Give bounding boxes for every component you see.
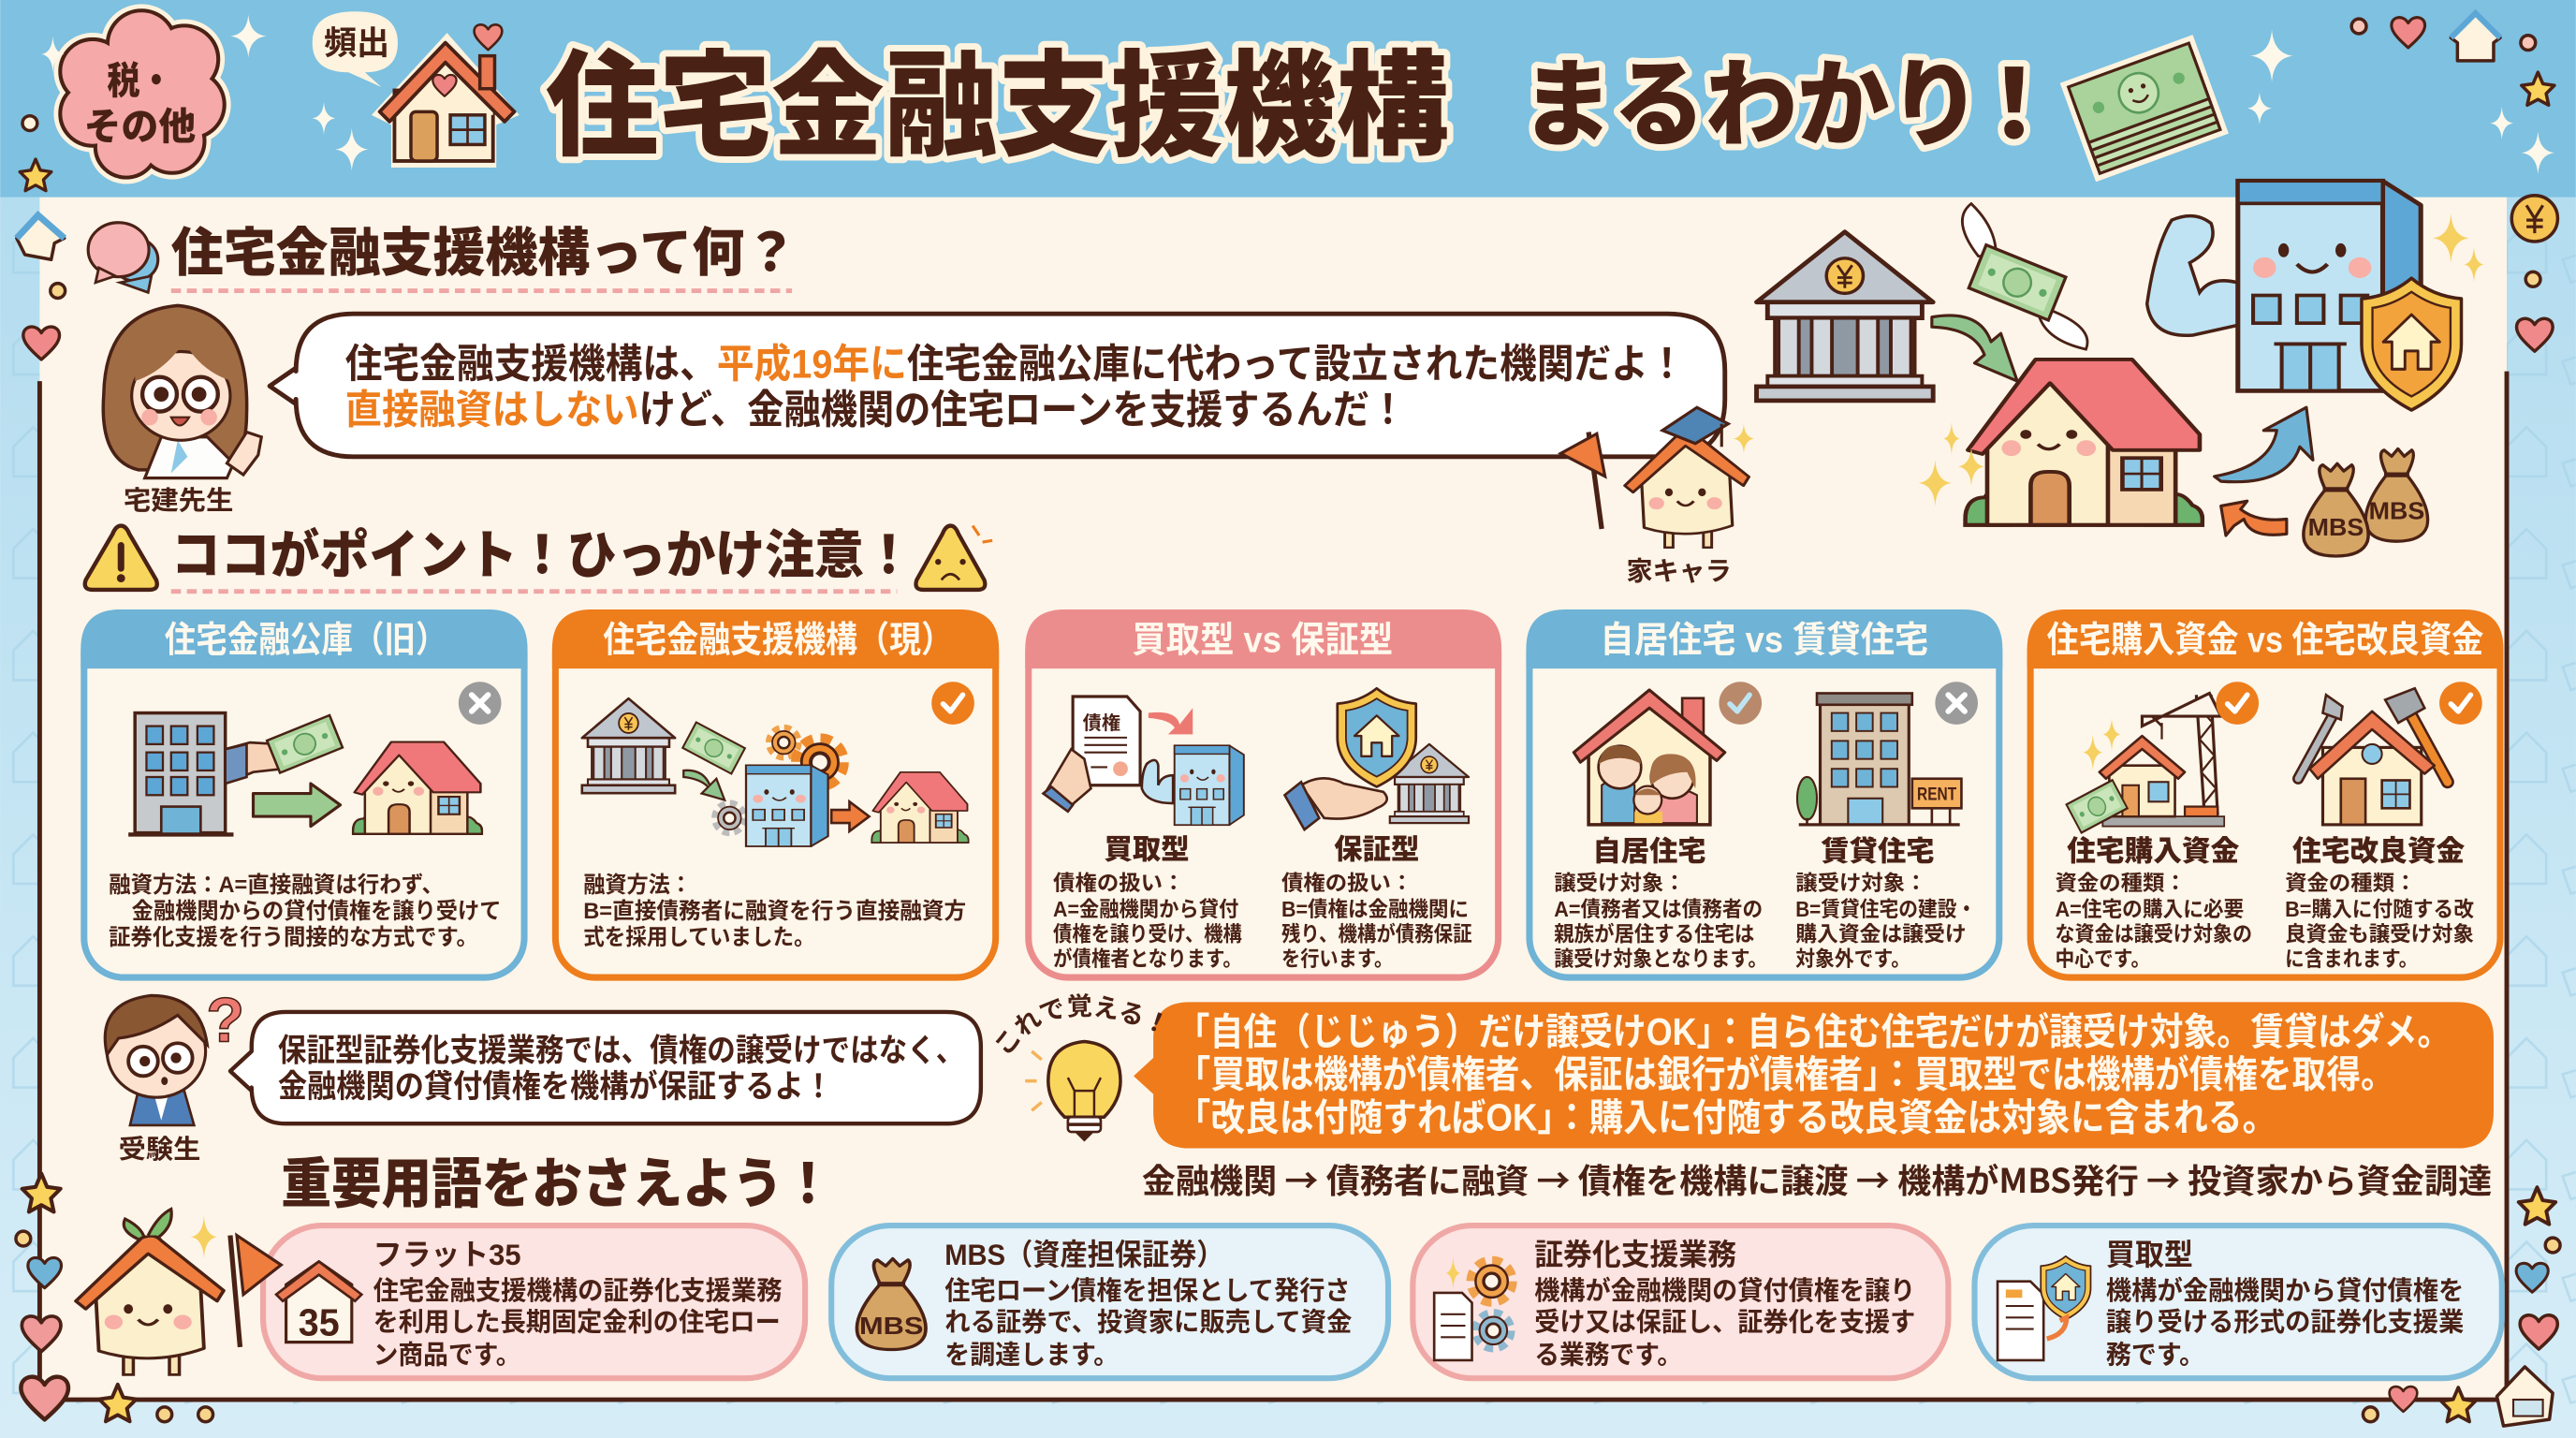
text: method A: 融資方法：A=直接融資は行わず、 xyxy=(109,873,444,898)
text: 住宅購入資金 column: 中心です。 xyxy=(2055,946,2150,971)
text: 自居住宅 column: 譲受け対象： xyxy=(1554,871,1686,895)
text: 住宅ローン債権を担保として発行さ xyxy=(944,1276,1351,1305)
text: 保証型 column: 残り、機構が債務保証 xyxy=(1281,921,1472,946)
header sparkles and decorations xyxy=(20,13,2554,191)
text: 住宅改良資金 column: 資金の種類： xyxy=(2285,871,2416,895)
arrow: building up xyxy=(2215,407,2313,482)
term card: MBS xyxy=(831,1225,1388,1378)
text: 賃貸住宅 column: 購入資金は譲受け xyxy=(1795,921,1967,946)
character: 家キャラ xyxy=(1560,407,1754,585)
card: 住宅金融支援機構（現）: 住宅金融支援機構（現） xyxy=(603,621,953,661)
icon: MBS bag xyxy=(856,1258,926,1350)
text: を利用した長期固定金利の住宅ロー xyxy=(373,1307,781,1336)
text: フラット35 xyxy=(373,1238,521,1271)
text: 受け又は保証し、証券化を支援す xyxy=(1534,1307,1915,1336)
heading: ココがポイント！ひっかけ注意！: ココがポイント！ひっかけ注意！ xyxy=(171,525,914,584)
text: れる証券で、投資家に販売して資金 xyxy=(944,1307,1352,1336)
title xyxy=(546,43,2061,171)
text: 買取型 column: A=金融機関から貸付 xyxy=(1053,897,1239,921)
text: method A xyxy=(109,873,501,950)
icon: MBS bags: MBS xyxy=(2308,513,2364,541)
callout: key takeaways xyxy=(1134,1002,2494,1149)
text: 保証型 column xyxy=(1281,835,1472,971)
text: 住宅購入資金 column: 住宅購入資金 xyxy=(2067,834,2240,867)
card: 住宅金融公庫（旧） xyxy=(80,609,528,977)
term card: 買取型 xyxy=(1974,1225,2502,1378)
text: 買取型 column: が債権者となります。 xyxy=(1053,946,1242,971)
text: 機構が金融機関の貸付債権を譲り xyxy=(1534,1275,1915,1305)
term card: 証券化支援業務 xyxy=(1412,1225,1948,1378)
callout: key takeaways: 「改良は付随すればOK」：購入に付随する改良資金は対象に含まれる。 xyxy=(1177,1095,2276,1138)
card: 自居住宅 vs 賃貸住宅 xyxy=(1526,609,2002,977)
text: 自居住宅 column xyxy=(1554,836,1767,971)
right decorations xyxy=(2363,196,2560,1426)
card: 住宅購入資金 vs 住宅改良資金: 住宅購入資金 vs 住宅改良資金 xyxy=(2047,621,2483,661)
icon: light bulb xyxy=(1025,1041,1120,1142)
header band xyxy=(0,0,2576,198)
icon: warning triangle xyxy=(85,526,157,590)
text xyxy=(2106,1238,2464,1369)
text: 買取型 column: 債権を譲り受け、機構 xyxy=(1053,921,1242,946)
text: 保証型 column: を行います。 xyxy=(1281,946,1393,971)
illustration: purchase type xyxy=(1044,697,1244,825)
icon: check badge xyxy=(931,682,974,725)
icon: house 35: 35 xyxy=(299,1301,340,1344)
icon: document and shield xyxy=(1998,1256,2090,1360)
text: 証券化支援業務 xyxy=(1534,1238,1736,1271)
badge: 税・その他: その他 xyxy=(84,105,196,148)
character: sprout house xyxy=(76,1209,281,1374)
sparkles near house xyxy=(1919,422,1984,506)
text: 住宅購入資金 column xyxy=(2055,834,2252,971)
icon: house 35 xyxy=(276,1262,361,1344)
title: ！ xyxy=(1967,51,2061,158)
text: 住宅購入資金 column: A=住宅の購入に必要 xyxy=(2055,897,2244,921)
text: 自居住宅 column: 自居住宅 xyxy=(1593,836,1706,867)
card: 住宅金融支援機構（現） xyxy=(552,609,999,977)
text: 保証型 column: 保証型 xyxy=(1334,835,1419,866)
title: まるわかり xyxy=(1521,51,1981,158)
illustration: house and crane xyxy=(2067,693,2224,832)
flow text: 金融機関 → 債務者に融資 → 債権を機構に譲渡 → 機構がMBS発行 → 投資家から資金調達 xyxy=(1142,1154,2492,1203)
speech bubble: 保証型 explanation xyxy=(230,1012,981,1123)
speech bubble: 保証型 explanation: 保証型証券化支援業務では、債権の譲受けではなく、 xyxy=(278,1034,964,1069)
text: 住宅購入資金 column: な資金は譲受け対象の xyxy=(2055,921,2252,946)
badge: 税・その他: 税・ xyxy=(107,59,173,102)
illustration: family house xyxy=(1573,690,1725,825)
text: 住宅金融支援機構の証券化支援業務 xyxy=(373,1276,783,1305)
illustration: house and tools xyxy=(2298,688,2448,825)
illustration: rental apartment xyxy=(1797,693,1961,825)
speech bubble: main explanation: 直接融資はしないけど、金融機関の住宅ローンを支援するんだ！ xyxy=(345,389,1406,433)
card: 買取型 vs 保証型: 買取型 vs 保証型 xyxy=(1132,621,1393,661)
arrow: bank to house xyxy=(1932,315,2017,381)
illustration: indirect support xyxy=(582,698,970,846)
text: 住宅改良資金 column: 良資金も譲受け対象 xyxy=(2285,921,2474,946)
icon: winged money xyxy=(1933,202,2120,351)
callout: key takeaways: 「自住（じじゅう）だけ譲受けOK」：自ら住む住宅だけが譲受け対象。賃貸はダメ。 xyxy=(1177,1010,2451,1053)
card: 住宅金融公庫（旧）: 住宅金融公庫（旧） xyxy=(165,621,447,661)
icon: check badge (own home) xyxy=(1719,682,1762,725)
text: 機構が金融機関から貸付債権を xyxy=(2106,1275,2464,1305)
character: 受験生: ? xyxy=(206,986,244,1055)
text xyxy=(944,1238,1352,1369)
character: 宅建先生 xyxy=(103,305,261,515)
text: 住宅改良資金 column: 住宅改良資金 xyxy=(2292,834,2466,867)
illustration: direct loan xyxy=(128,713,483,834)
speech bubble: main explanation: 住宅金融支援機構は、平成19年に住宅金融公庫に代わって設立された機関だよ！ xyxy=(345,343,1686,388)
text: 保証型 column: 債権の扱い： xyxy=(1281,871,1412,895)
illustration: rental apartment: RENT xyxy=(1917,785,1956,805)
text: 住宅改良資金 column: に含まれます。 xyxy=(2285,946,2418,971)
label: これで覚える！: これで覚える！ xyxy=(996,993,1163,1052)
text: 住宅購入資金 column: 資金の種類： xyxy=(2055,871,2187,895)
text: 自居住宅 column: A=債務者又は債務者の xyxy=(1554,897,1763,921)
text: 譲り受ける形式の証券化支援業 xyxy=(2106,1307,2464,1336)
icon: MBS bags: MBS xyxy=(2369,496,2424,524)
speech bubble: main explanation xyxy=(268,314,1725,457)
icon: worried triangle xyxy=(915,526,992,590)
card: 買取型 vs 保証型 xyxy=(1025,609,1501,977)
illustration: securitization flow xyxy=(1757,181,2483,556)
text: る業務です。 xyxy=(1534,1340,1682,1369)
icon: x badge (rental) xyxy=(1935,682,1978,725)
text: method B: 融資方法： xyxy=(583,873,692,898)
text: 住宅改良資金 column xyxy=(2285,834,2474,971)
text: を調達します。 xyxy=(944,1340,1119,1369)
text xyxy=(373,1238,783,1369)
callout: key takeaways: 「買取は機構が債権者、保証は銀行が債権者」：買取型では機構が債権を取得。 xyxy=(1177,1053,2395,1096)
text: 賃貸住宅 column: 譲受け対象： xyxy=(1795,871,1927,895)
icon: money stack xyxy=(2069,43,2220,173)
text: 自居住宅 column: 親族が居住する住宅は xyxy=(1554,921,1755,946)
text: 自居住宅 column: 譲受け対象となります。 xyxy=(1554,946,1767,971)
speech bubble: 保証型 explanation: 金融機関の貸付債権を機構が保証するよ！ xyxy=(278,1068,833,1105)
title: 住宅金融支援機構 xyxy=(546,43,1449,171)
term card: フラット35 xyxy=(263,1225,805,1378)
illustration: guarantee type xyxy=(1284,688,1469,829)
icon: x badge xyxy=(459,682,501,725)
text: method B xyxy=(583,873,966,950)
text: method A: 証券化支援を行う間接的な方式です。 xyxy=(109,925,478,950)
text: 賃貸住宅 column: 賃貸住宅 xyxy=(1821,835,1934,867)
text: 賃貸住宅 column xyxy=(1795,835,1976,971)
character: 受験生: 受験生 xyxy=(119,1135,200,1164)
icon: bank xyxy=(1757,232,1933,401)
card: 自居住宅 vs 賃貸住宅: 自居住宅 vs 賃貸住宅 xyxy=(1600,621,1928,661)
heading: 住宅金融支援機構って何？: 住宅金融支援機構って何？ xyxy=(171,224,797,283)
icon: MBS bags xyxy=(2304,448,2428,556)
heading: 重要用語をおさえよう！: 重要用語をおさえよう！ xyxy=(281,1154,833,1214)
icon: header house xyxy=(372,24,520,168)
arrow: orange to house xyxy=(2221,501,2287,536)
text: method B: B=直接債務者に融資を行う直接融資方 xyxy=(583,899,966,924)
text: 務です。 xyxy=(2106,1340,2204,1369)
icon: MBS bag: MBS xyxy=(859,1312,923,1340)
text: 買取型 xyxy=(2106,1238,2193,1271)
icon: smiling house xyxy=(1963,360,2204,525)
text: MBS（資産担保証券） xyxy=(944,1238,1224,1271)
illustration: purchase type: 債権 xyxy=(1083,712,1120,734)
text: 買取型 column: 買取型 xyxy=(1104,835,1190,866)
character: 家キャラ: 家キャラ xyxy=(1626,556,1732,585)
text: 賃貸住宅 column: 対象外です。 xyxy=(1795,946,1910,971)
text xyxy=(1534,1238,1915,1369)
left decorations xyxy=(16,215,213,1422)
speech bubble: 頻出: 頻出 xyxy=(324,25,389,62)
text: 買取型 column xyxy=(1053,835,1242,971)
card: 住宅購入資金 vs 住宅改良資金 xyxy=(2027,609,2503,977)
icon: check badge (purchase) xyxy=(2216,682,2259,725)
text: method A: 金融機関からの貸付債権を譲り受けて xyxy=(132,899,501,924)
speech bubble: 頻出 xyxy=(313,11,398,87)
icon: check badge (improvement) xyxy=(2439,682,2482,725)
character: 受験生 xyxy=(105,986,244,1164)
text: 賃貸住宅 column: B=賃貸住宅の建設・ xyxy=(1795,897,1976,921)
text: 住宅改良資金 column: B=購入に付随する改 xyxy=(2285,897,2474,921)
badge: 税・その他 xyxy=(62,12,223,176)
character: 宅建先生: 宅建先生 xyxy=(124,486,233,515)
icon: gears and document xyxy=(1434,1256,1511,1360)
icon: chat bubbles xyxy=(88,223,158,292)
text: 保証型 column: B=債権は金融機関に xyxy=(1281,897,1469,921)
text: ン商品です。 xyxy=(373,1340,521,1369)
text: 買取型 column: 債権の扱い： xyxy=(1053,871,1184,895)
icon: strong building with shield xyxy=(2147,181,2483,410)
text: method B: 式を採用していました。 xyxy=(583,925,815,950)
